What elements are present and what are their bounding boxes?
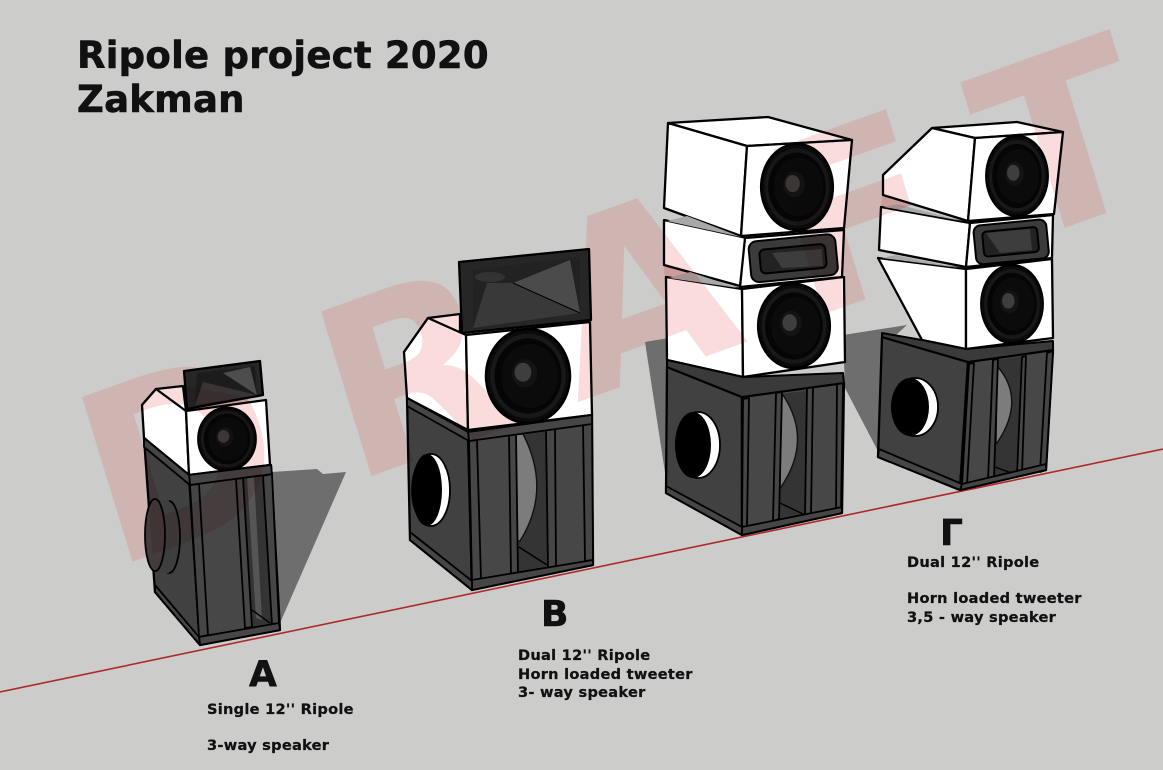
speaker A — [142, 361, 280, 645]
speaker A: head cabinet — [142, 386, 270, 475]
speaker C: lower cabinet — [666, 277, 845, 377]
speaker D: bass front — [878, 333, 1053, 490]
speaker A: bass side panel — [144, 438, 200, 645]
speaker D: bass side panel — [878, 337, 968, 490]
speaker C: top woofer — [761, 144, 833, 230]
speaker C: tweeter — [748, 234, 839, 283]
speaker B: bass front — [407, 398, 593, 590]
red ground line — [0, 449, 1163, 692]
description A: Single 12'' Ripole — [207, 701, 354, 718]
speaker A: bass front — [144, 438, 280, 645]
description Gamma: Horn loaded tweeter — [907, 590, 1082, 607]
speaker B: bass side panel — [407, 398, 472, 590]
speaker A: horn tweeter — [184, 361, 263, 409]
shadow: speaker C left — [645, 338, 668, 492]
speaker D: top woofer — [986, 136, 1048, 216]
speaker C — [664, 117, 852, 535]
speaker D: top cabinet — [883, 122, 1063, 221]
shadow: speaker A — [272, 469, 346, 623]
speaker D: shaded gap — [884, 204, 962, 221]
speaker B: side port — [412, 454, 450, 526]
description A: 3-way speaker — [207, 737, 330, 754]
shadow: speakers C and D middle — [843, 325, 907, 455]
label A: A — [249, 654, 277, 695]
description B: 3- way speaker — [518, 684, 646, 701]
speaker B: head cabinet — [404, 314, 592, 430]
speaker B: woofer — [486, 329, 570, 423]
speaker D: lower woofer — [981, 265, 1043, 343]
speaker C: side port — [675, 412, 720, 478]
speaker D: lower cabinet — [878, 258, 1053, 349]
label B: B — [541, 594, 568, 635]
description B: Horn loaded tweeter — [518, 666, 693, 683]
description Gamma: Dual 12'' Ripole — [907, 554, 1039, 571]
speaker A: side port — [145, 499, 180, 573]
speaker C: bass front — [666, 360, 844, 535]
speaker A: woofer — [198, 408, 256, 470]
speaker C: bass side panel — [666, 367, 742, 535]
title: Ripole project 2020 — [77, 34, 489, 77]
description B: Dual 12'' Ripole — [518, 647, 650, 664]
title: Zakman — [77, 78, 245, 121]
speaker B: horn tweeter — [459, 249, 591, 333]
description Gamma: 3,5 - way speaker — [907, 609, 1057, 626]
speaker D: lower gap shading — [882, 255, 960, 268]
speaker C: middle cabinet — [664, 220, 844, 287]
speaker C: shaded gap — [667, 216, 741, 237]
speaker D: side port — [891, 378, 938, 436]
label Gamma: Γ — [940, 513, 963, 554]
speaker C: lower gap shading — [669, 272, 738, 288]
speaker D: middle cabinet — [879, 207, 1053, 267]
speaker D — [878, 122, 1063, 490]
speaker D: tweeter — [973, 219, 1049, 265]
speaker C: lower woofer — [758, 284, 830, 368]
speaker C: top cabinet — [664, 117, 852, 236]
speaker B — [404, 249, 593, 590]
